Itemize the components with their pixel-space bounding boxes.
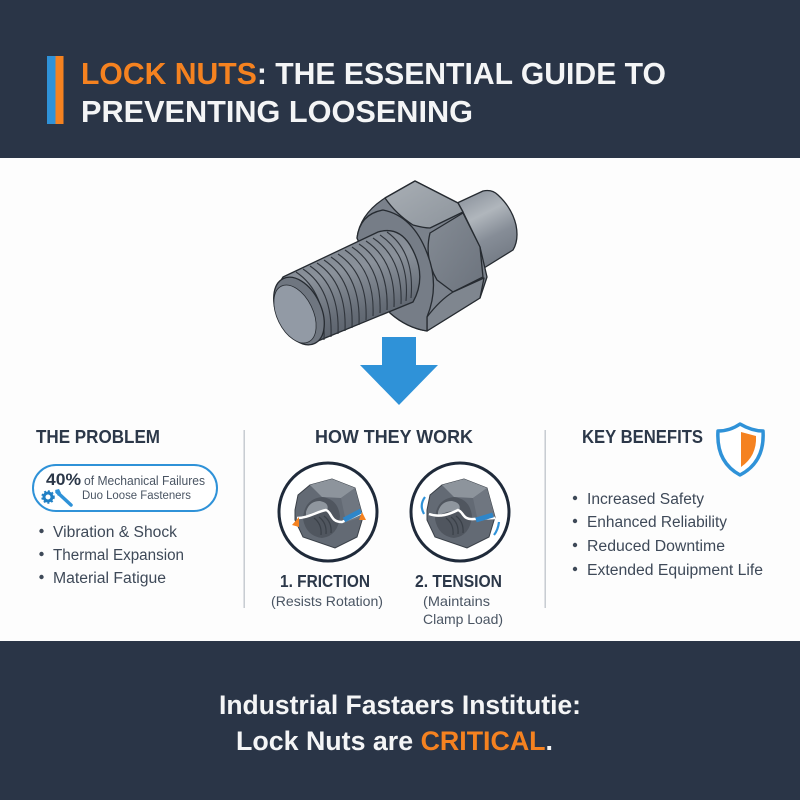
header band [0,0,800,158]
footer statement: Lock Nuts are CRITICAL. [236,726,553,756]
nut right face [428,213,483,292]
nut top face [385,181,463,228]
title accent bar [47,56,64,124]
list: benefits: Extended Equipment Life [587,562,763,579]
heading: key benefits: KEY BENEFITS [582,426,703,447]
bolt end face [265,278,325,350]
nut silhouette [357,181,487,331]
heading: the problem: THE PROBLEM [36,426,160,447]
heading: how they work: HOW THEY WORK [315,426,474,447]
callout: 40 percent statistic: of Mechanical Failures [84,474,205,488]
label: tension [415,571,503,627]
callout: 40 percent statistic: 40% [46,470,81,489]
label: tension: 2. TENSION [415,571,502,591]
list: benefits [573,491,763,579]
panel: the problem [33,426,217,587]
arrow: down [360,337,438,405]
icon: tension nut [411,463,509,561]
list: benefits: Enhanced Reliability [587,514,727,531]
panel: how they work [271,426,509,627]
list: causes: Thermal Expansion [53,547,184,564]
threaded shaft [276,231,420,343]
label: tension: (Maintains [423,593,490,609]
list: benefits: Reduced Downtime [587,538,725,555]
bolt stub end [455,190,517,268]
nut lower face [427,278,484,331]
panel: key benefits [573,424,763,579]
footer band [0,641,800,800]
illustration: bolt with lock nut [263,181,517,353]
label: tension: Clamp Load) [423,611,503,627]
callout: 40 percent statistic [33,465,217,511]
list: causes: Material Fatigue [53,570,166,587]
footer statement [219,690,581,756]
list: causes: Vibration & Shock [53,524,177,541]
thread lines [296,232,412,340]
label: friction: 1. FRICTION [280,571,370,591]
bolt end rim [263,269,335,353]
title: PREVENTING LOOSENING [81,94,473,129]
icon: shield [718,424,763,475]
label: friction: (Resists Rotation) [271,593,383,609]
icon: gear and wrench [42,489,71,505]
list: causes [39,524,184,587]
footer statement: Industrial Fastaers Institutie: [219,690,581,720]
icon: friction nut [279,463,377,561]
list: benefits: Increased Safety [587,491,704,508]
title [81,56,666,129]
washer face [357,210,434,331]
callout: 40 percent statistic: Duo Loose Fasteners [82,490,191,502]
label: friction [271,571,383,609]
title: LOCK NUTS: THE ESSENTIAL GUIDE TO [81,56,666,91]
